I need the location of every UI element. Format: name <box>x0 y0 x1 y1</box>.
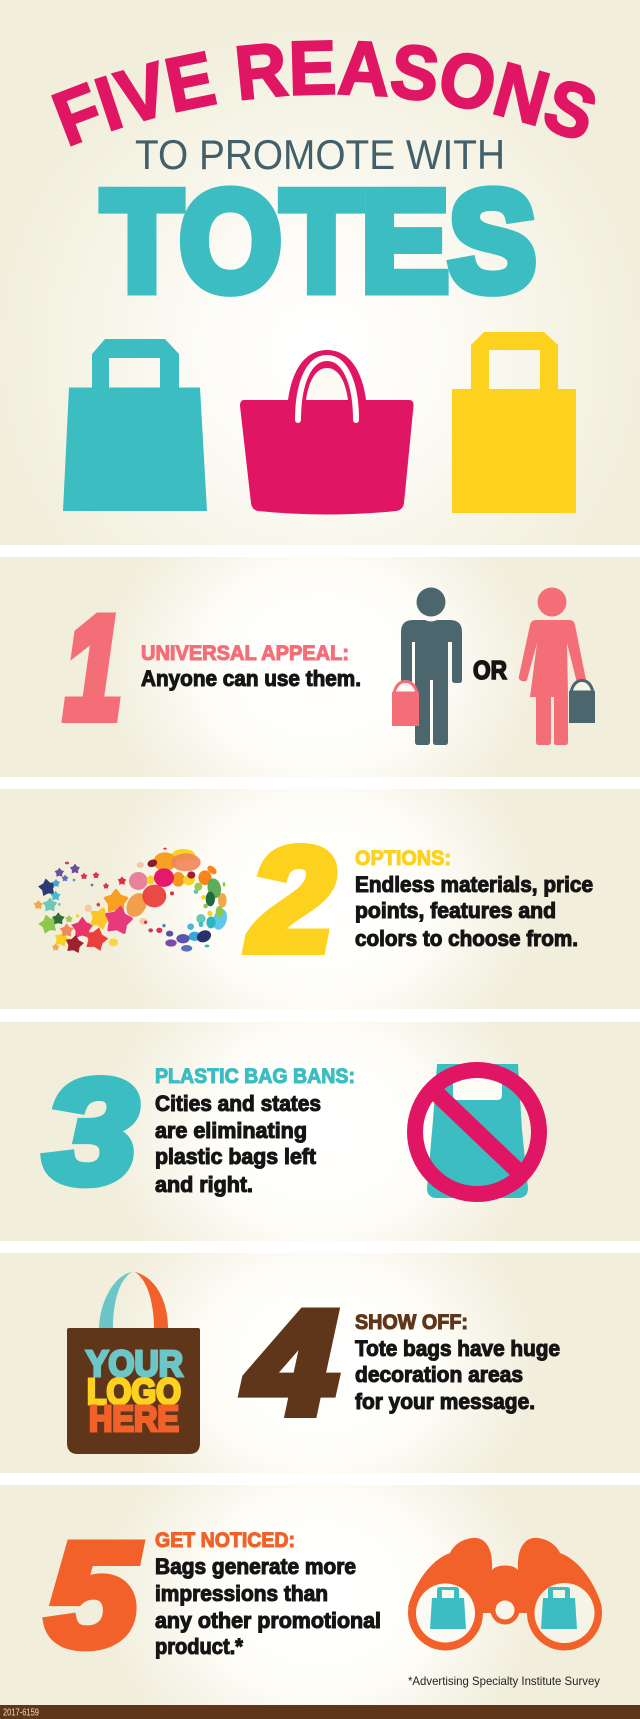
body text: are eliminating <box>155 1118 307 1143</box>
body text: plastic bags left <box>155 1144 317 1169</box>
panel: reason 5 get noticed <box>0 1485 640 1705</box>
panel: reason 4 show off <box>0 1253 640 1473</box>
icon: tote bag with logo: YOUR <box>86 1343 183 1384</box>
icon: man with bag <box>392 588 462 745</box>
body text: for your message. <box>355 1389 535 1414</box>
body text <box>155 1091 321 1197</box>
body text: Tote bags have huge <box>355 1336 560 1361</box>
heading: universal appeal: UNIVERSAL APPEAL: <box>141 641 349 665</box>
icon: teal shopping bag <box>63 339 207 511</box>
footer bar <box>0 1705 640 1719</box>
icon: yellow shopping bag <box>452 332 576 513</box>
label: or: OR <box>473 655 507 685</box>
body text <box>155 1554 381 1659</box>
body text: any other promotional <box>155 1608 381 1633</box>
number 1: 1 <box>64 586 122 749</box>
heading: get noticed: GET NOTICED: <box>155 1528 295 1552</box>
icon: magenta tote bag <box>240 350 414 514</box>
number 3: 3 <box>45 1050 137 1213</box>
panel: header <box>0 0 640 545</box>
title: five reasons: FIVE REASONS <box>51 40 596 146</box>
number 2: 2 <box>247 818 334 981</box>
icon: tote bag with logo: HERE <box>89 1398 179 1439</box>
icon: woman with bag <box>519 588 595 745</box>
body text <box>355 1336 560 1414</box>
panel: reason 2 options <box>0 789 640 1009</box>
footnote: *Advertising Specialty Institute Survey <box>408 1674 600 1688</box>
subtitle: to promote with: TO PROMOTE WITH <box>135 131 505 178</box>
body text: decoration areas <box>355 1362 523 1387</box>
heading: plastic bag bans: PLASTIC BAG BANS: <box>155 1064 355 1088</box>
icon: tote bag with logo <box>67 1272 200 1454</box>
icon: colourful infinity symbol <box>34 848 229 954</box>
heading: options: OPTIONS: <box>355 846 451 870</box>
panel: reason 1 universal appeal <box>0 557 640 777</box>
title: totes: TOTES <box>102 162 536 321</box>
number 4: 4 <box>244 1281 337 1444</box>
body text: product.* <box>155 1634 243 1659</box>
footer code: 2017-6159 <box>3 1708 39 1718</box>
icon: binoculars with bags <box>408 1538 602 1650</box>
icon: tote bag with logo: LOGO <box>87 1371 181 1412</box>
body text: Cities and states <box>155 1091 321 1116</box>
body text: Endless materials, price <box>355 872 593 897</box>
body text: points, features and <box>355 898 556 923</box>
body text: and right. <box>155 1172 253 1197</box>
body text: Bags generate more <box>155 1554 356 1579</box>
heading: show off: SHOW OFF: <box>355 1310 468 1334</box>
icon: banned plastic bag <box>415 1064 539 1198</box>
body text: impressions than <box>155 1581 328 1606</box>
number 5: 5 <box>47 1513 139 1676</box>
body text <box>355 872 593 951</box>
body text: Anyone can use them. <box>141 666 361 691</box>
panel: reason 3 plastic bag bans <box>0 1022 640 1241</box>
body text: colors to choose from. <box>355 926 578 951</box>
